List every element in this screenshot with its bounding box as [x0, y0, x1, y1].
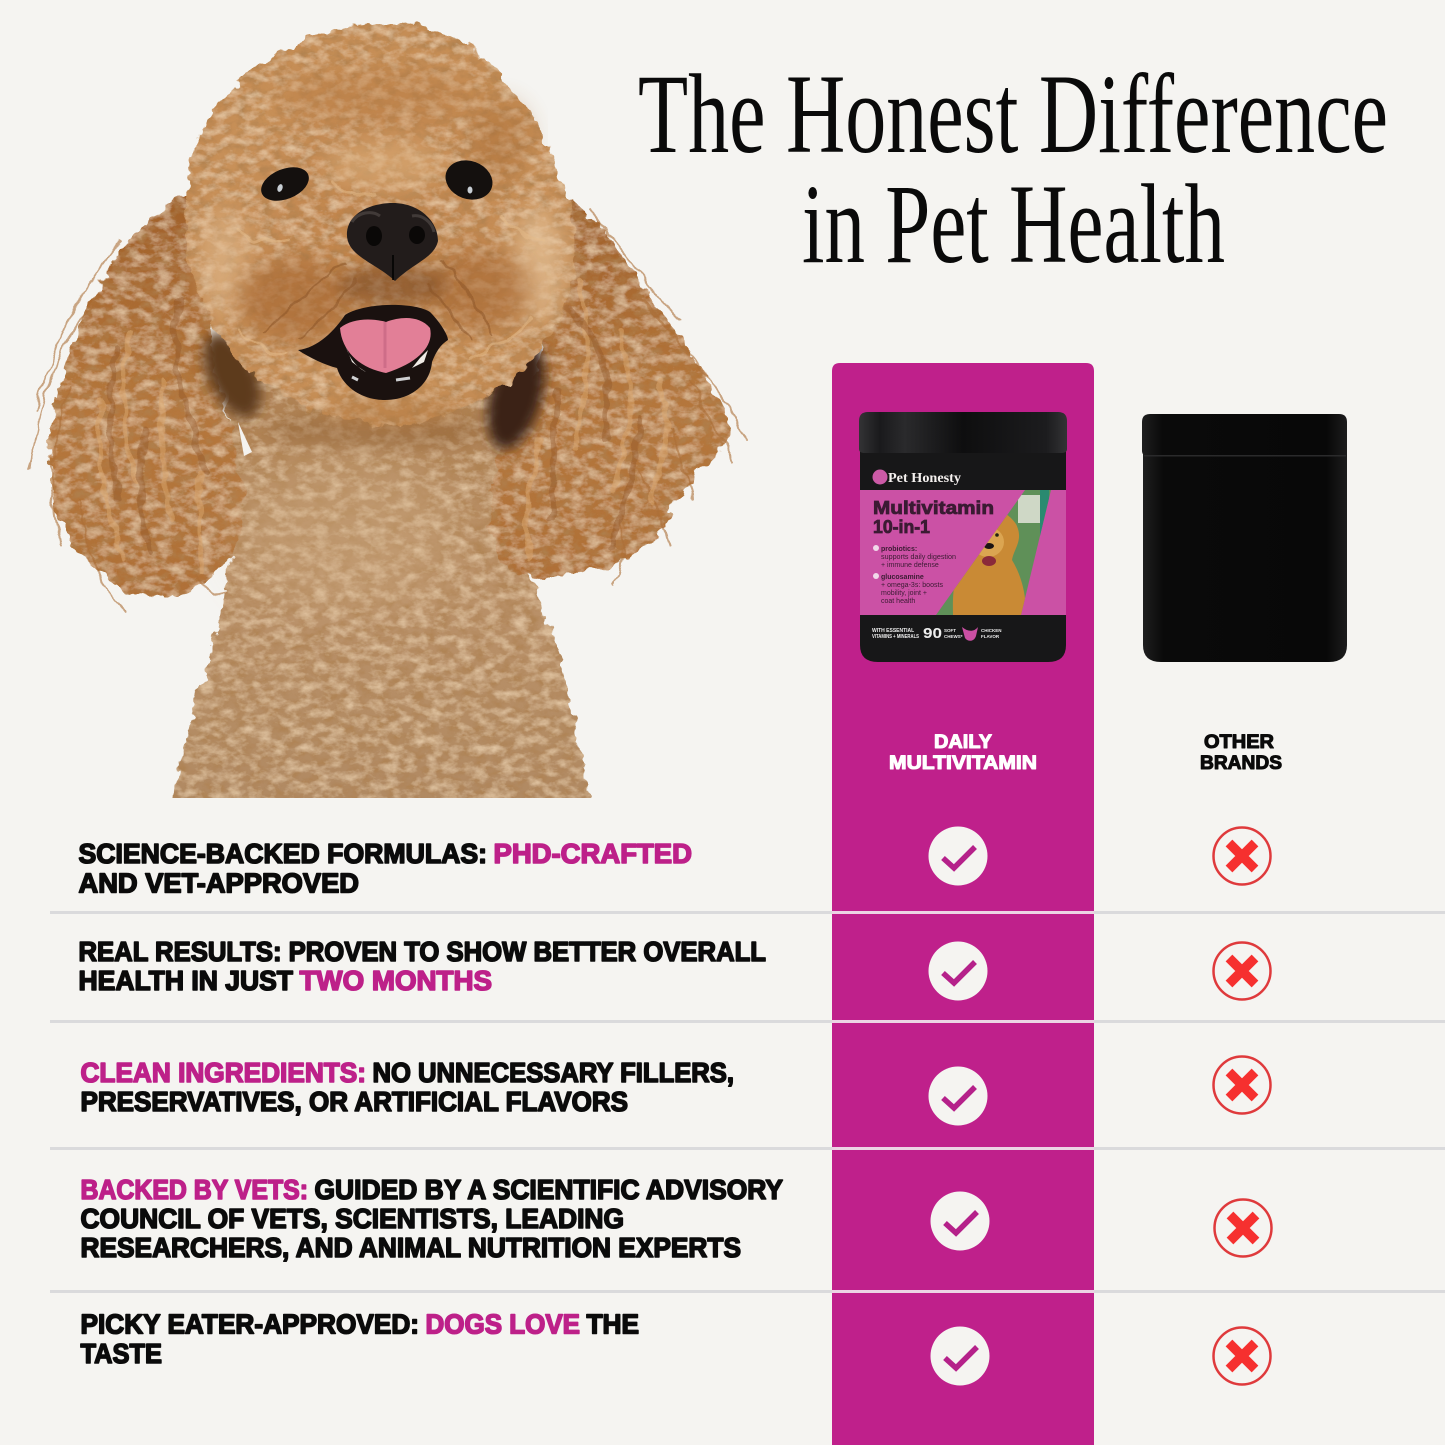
ear strands: [30, 210, 748, 612]
title: [638, 52, 1388, 287]
benefits: supports daily digestion: [881, 554, 956, 561]
shadow between ears and neck: [191, 323, 556, 456]
mouth: [298, 305, 448, 400]
title: in Pet Health: [802, 162, 1225, 287]
row 3 text: [80, 1057, 734, 1117]
benefits: glucosamine: [881, 574, 924, 581]
icon: cross row 2: [1214, 942, 1270, 1000]
eyes: [261, 160, 492, 201]
row 1 text: AND VET-APPROVED: [78, 868, 359, 898]
icon: check row 4: [930, 1192, 990, 1250]
row 1 text: SCIENCE-BACKED FORMULAS:: [78, 838, 487, 869]
jar lid: [859, 412, 1067, 453]
column heading: daily multivitamin: [889, 731, 1037, 774]
row 3 text: CLEAN INGREDIENTS:: [80, 1057, 366, 1088]
jar footer: FLAVOR: [981, 634, 1000, 639]
dog body: [172, 360, 592, 815]
product name: [873, 498, 994, 537]
benefits: + omega-3s: boosts: [881, 582, 943, 589]
row 5 text: TASTE: [80, 1338, 162, 1369]
right ear: [489, 200, 730, 578]
dog head: [186, 22, 574, 425]
row 5 text: THE: [586, 1308, 639, 1340]
product jar: Pet Honesty: [859, 412, 1067, 662]
row dividers: [50, 911, 1445, 1293]
row 2 text: REAL RESULTS: PROVEN TO SHOW BETTER OVERALL: [78, 936, 766, 967]
icon: check row 2: [928, 942, 988, 1000]
column heading: daily multivitamin: DAILY: [934, 731, 992, 753]
left ear: [50, 192, 243, 597]
row 4 text: BACKED BY VETS:: [80, 1174, 308, 1205]
row 4 text: GUIDED BY A SCIENTIFIC ADVISORY: [314, 1174, 783, 1205]
dog photo: [30, 22, 748, 815]
nose: [347, 203, 438, 281]
jar footer: [872, 625, 1002, 642]
jar footer: SOFT: [944, 628, 956, 633]
jar footer: VITAMINS + MINERALS: [872, 634, 920, 640]
fur shading: [201, 65, 564, 610]
row 4 text: COUNCIL OF VETS, SCIENTISTS, LEADING: [80, 1203, 624, 1234]
brand: Pet Honesty: [888, 470, 961, 485]
row 1 text: PHD-CRAFTED: [494, 838, 692, 869]
head strands: [235, 180, 545, 360]
panel: daily multivitamin column: [832, 363, 1094, 1445]
jar footer: CHEWS*: [944, 634, 963, 639]
jar footer: WITH ESSENTIAL: [872, 628, 914, 634]
row 2 text: [78, 936, 766, 996]
icon: cross row 5: [1214, 1328, 1270, 1384]
product name: 10-in-1: [873, 517, 930, 537]
row 5 text: [80, 1308, 639, 1369]
column heading: other brands: [1200, 731, 1282, 774]
icon: cross row 3: [1214, 1056, 1270, 1114]
row 4 text: [80, 1174, 783, 1263]
benefits: mobility, joint +: [881, 590, 927, 597]
column heading: other brands: OTHER: [1204, 731, 1274, 753]
benefits: [873, 545, 956, 605]
row 1 text: [78, 838, 692, 898]
icon: check row 1: [928, 826, 988, 886]
icon: cross row 1: [1214, 828, 1270, 884]
icon: cross row 4: [1214, 1200, 1272, 1256]
benefits: + immune defense: [881, 562, 939, 569]
column heading: daily multivitamin: MULTIVITAMIN: [889, 752, 1037, 774]
row 5 text: DOGS LOVE: [426, 1308, 580, 1340]
jar footer: 90: [923, 625, 942, 642]
benefits: probiotics:: [881, 546, 917, 553]
row 4 text: RESEARCHERS, AND ANIMAL NUTRITION EXPERTS: [80, 1232, 741, 1263]
row 5 text: PICKY EATER-APPROVED:: [80, 1308, 419, 1340]
icon: check row 5: [930, 1326, 990, 1386]
label photo: [930, 490, 1055, 615]
icon: check row 3: [928, 1066, 988, 1126]
jar label: [860, 490, 1066, 615]
row 3 text: NO UNNECESSARY FILLERS,: [372, 1057, 734, 1088]
product name: Multivitamin: [873, 498, 994, 518]
row 3 text: PRESERVATIVES, OR ARTIFICIAL FLAVORS: [80, 1086, 628, 1117]
jar footer: CHICKEN: [981, 628, 1002, 633]
row 2 text: HEALTH IN JUST: [78, 965, 293, 996]
row 2 text: TWO MONTHS: [300, 965, 492, 996]
other brands jar: [1142, 414, 1347, 662]
benefits: coat health: [881, 598, 915, 605]
column heading: other brands: BRANDS: [1200, 752, 1282, 774]
